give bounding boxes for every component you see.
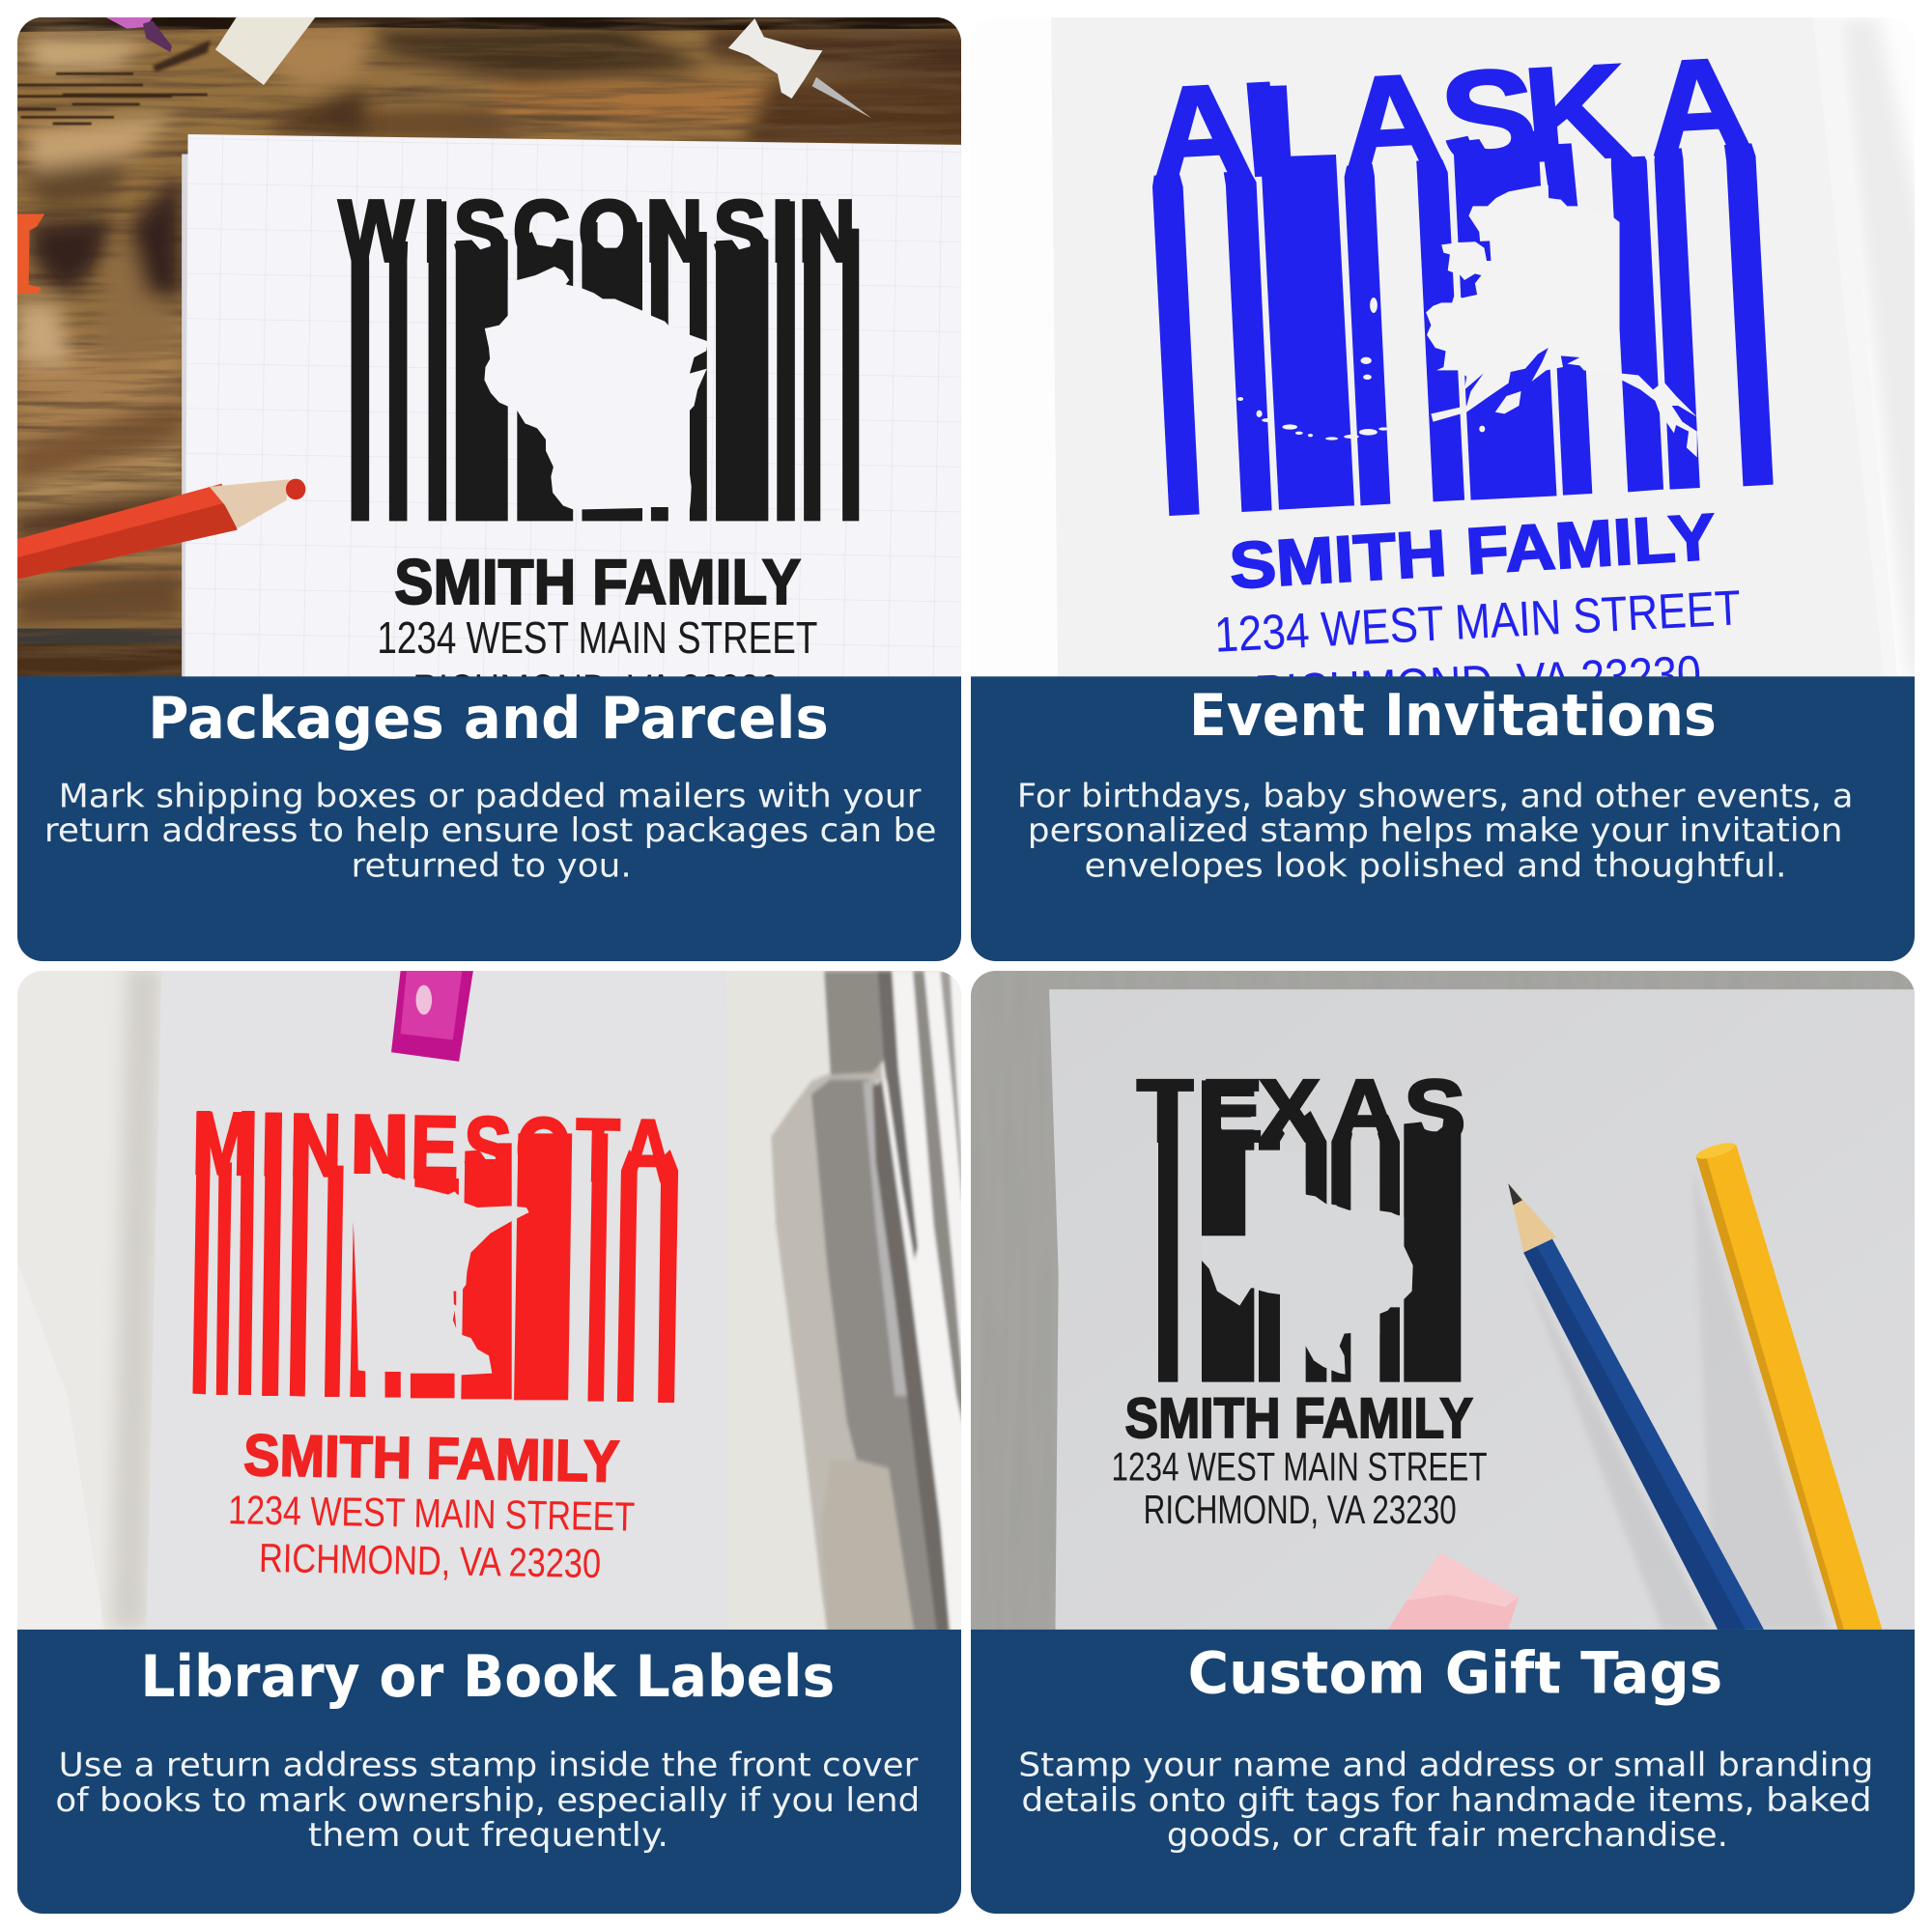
body text: goods, or craft fair merchandise. [1167,1816,1728,1854]
icon: white push pin [728,18,871,118]
stamp graphic: Minnesota barcode [191,1093,678,1403]
body text: them out frequently. [308,1816,668,1854]
icon: paper card [147,971,733,1630]
family name: SMITH FAMILY [394,547,801,617]
photo: paper, pencils and eraser on grey wood [966,966,1932,1644]
stamp title: TEXAS [1137,1062,1466,1160]
body text: Use a return address stamp inside the front cover [59,1747,918,1784]
heading: Packages and Parcels [148,685,829,752]
body text: details onto gift tags for handmade items, baked [1021,1781,1872,1819]
caption box [17,676,961,961]
state silhouette: Wisconsin [484,267,708,509]
icon: yellow pencil [1694,1140,1882,1630]
stamp address: Smith family [1217,512,1739,676]
family name: SMITH FAMILY [1228,500,1718,603]
street line: 1234 WEST MAIN STREET [377,612,817,663]
state silhouette: Alaska [1237,185,1697,457]
panel: library or book labels [0,966,985,1932]
stamp graphic: Texas barcode [1137,1062,1466,1382]
family name: SMITH FAMILY [243,1422,620,1494]
caption box [966,676,1932,984]
city line: RICHMOND, VA 23230 [1254,645,1702,721]
body text: of books to mark ownership, especially if you lend [55,1781,920,1819]
body text: For birthdays, baby showers, and other events, a [1017,778,1853,815]
city line: RICHMOND, VA 23230 [259,1535,601,1586]
stamp graphic: Alaska barcode [1142,30,1774,516]
body text: Mark shipping boxes or padded mailers with your [59,778,922,815]
icon: blue pencil [1508,1183,1764,1630]
caption box [0,1630,985,1932]
heading: Event Invitations [1189,682,1717,749]
icon: purple marker [106,17,172,52]
wood detail, top-left [17,30,365,365]
stamp address: Smith family [228,1422,636,1586]
photo: wood desk with paper, pencil and pins [0,0,985,678]
stamp bars [349,201,859,521]
icon: metal clipboard clip [727,971,973,1634]
icon: paper sheet [1049,989,1927,1630]
icon: paper sheet [182,154,961,678]
stamp title: WISCONSIN [339,183,856,280]
photo: white paper sheets [1051,17,1915,676]
body text [55,1747,920,1854]
body text: envelopes look polished and thoughtful. [1084,847,1787,885]
panhandle [1622,374,1697,457]
body text [1017,778,1853,885]
body text [44,778,936,885]
paper fill between E arms [1221,1096,1256,1128]
icon: magenta clip [391,971,473,1062]
stamp bars [1152,85,1774,516]
icon: pink eraser [1388,1552,1519,1630]
city line: RICHMOND, VA 23230 [1144,1487,1457,1532]
panel: packages and parcels [0,0,985,984]
street line: 1234 WEST MAIN STREET [1112,1444,1488,1490]
stamp title: ALASKA [1142,30,1757,210]
street line: 1234 WEST MAIN STREET [228,1487,636,1540]
street line: 1234 WEST MAIN STREET [1213,580,1742,663]
panel: event invitations [966,0,1932,984]
caption box [966,1630,1932,1932]
heading: Library or Book Labels [140,1643,835,1710]
pencil shadows [1693,1169,1829,1630]
icon: red pencil [17,479,305,580]
islands [1495,391,1521,413]
body text: personalized stamp helps make your invitation [1028,811,1843,849]
icon: red pin [17,213,44,294]
state silhouette: Texas [1202,1151,1413,1375]
stamp address: Smith family [1112,1387,1488,1532]
body text: Stamp your name and address or small branding [1018,1747,1873,1784]
stamp bars [192,1111,678,1403]
body text [1018,1747,1873,1854]
stamp graphic: Wisconsin barcode [339,183,859,521]
heading: Custom Gift Tags [1188,1640,1722,1707]
city line: RICHMOND, VA 23230 [412,665,780,715]
stamp title: MINNESOTA [191,1093,674,1201]
wood props, top-left [17,17,315,294]
body text: return address to help ensure lost packages can be [44,811,936,849]
body text: returned to you. [352,847,632,885]
river marks [453,1292,456,1328]
stamp bars [1158,1080,1461,1382]
family name: SMITH FAMILY [1125,1387,1473,1450]
photo: note card on clipboard [0,966,985,1644]
state silhouette: Minnesota [347,1174,529,1375]
stamp address: Smith family [380,558,817,676]
panel: custom gift tags [966,966,1932,1932]
icon: white chalk [215,17,315,85]
